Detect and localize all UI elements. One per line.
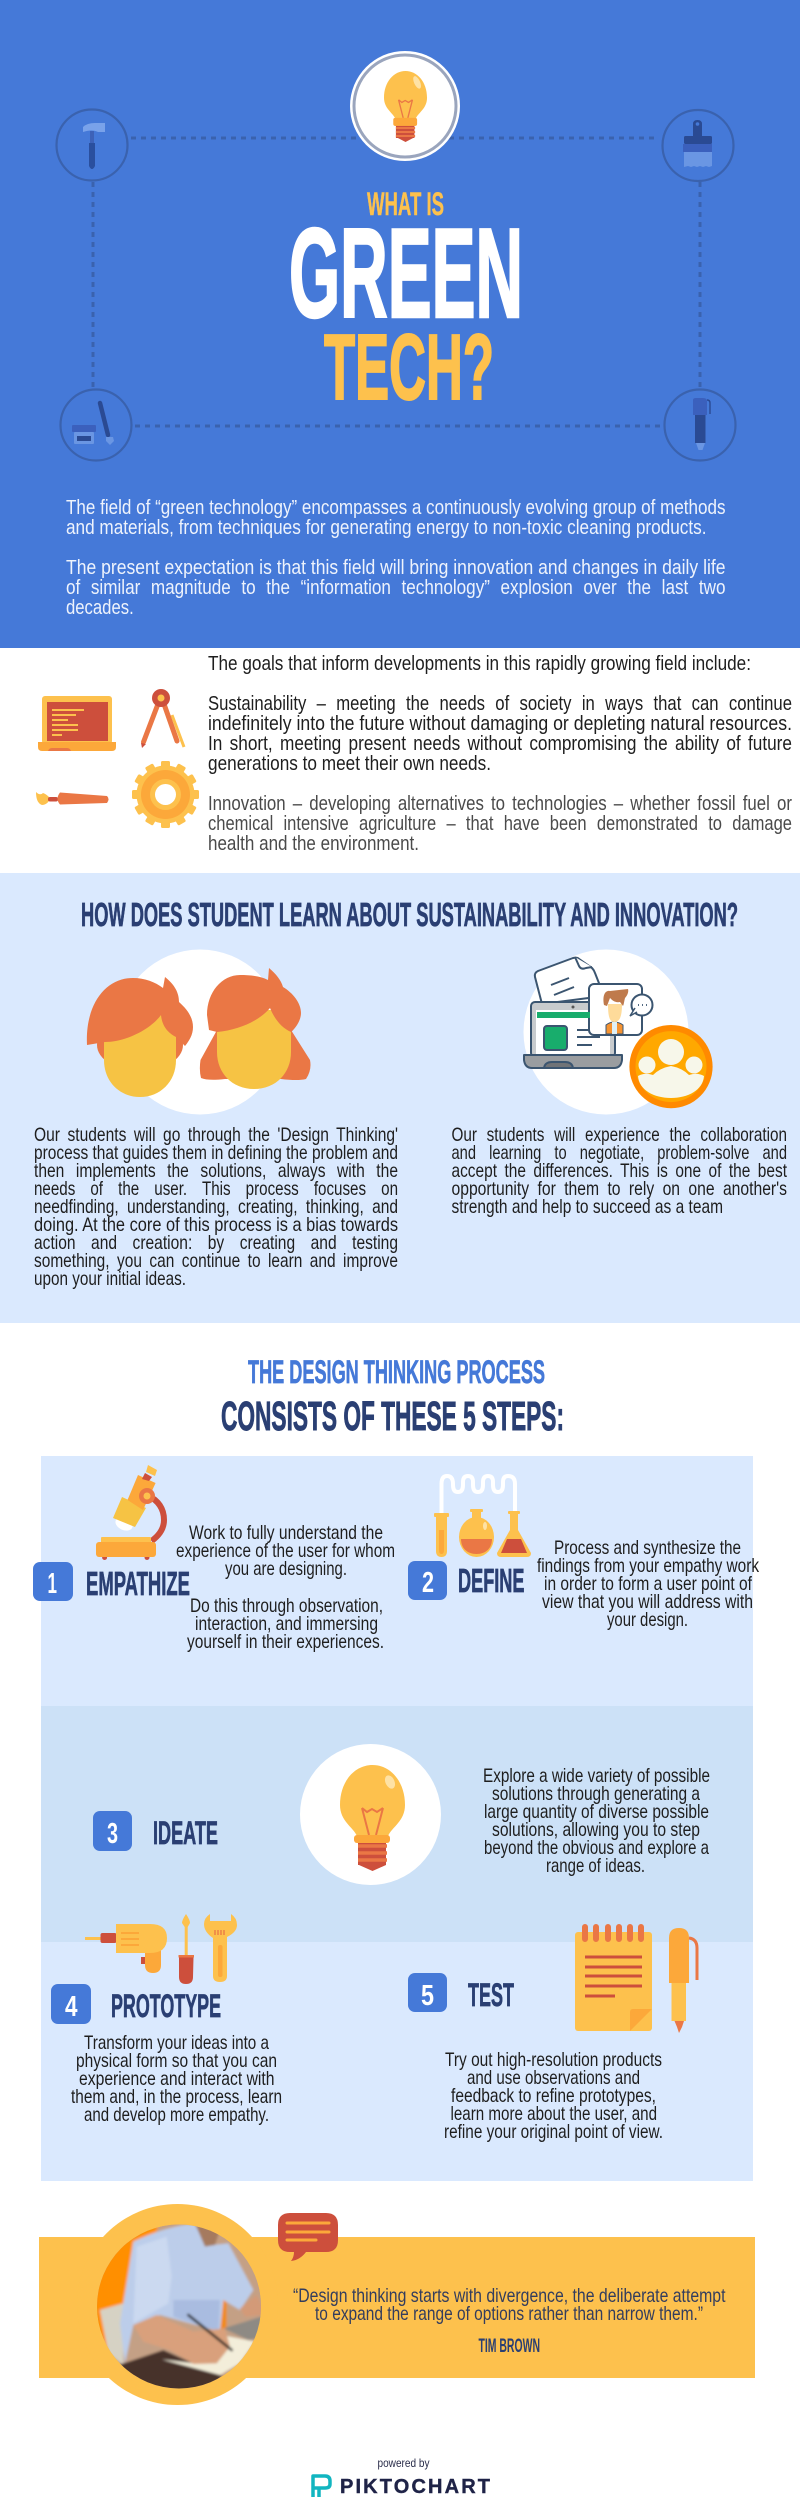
text: empathize description: [176, 1522, 395, 1653]
label: test: TEST: [468, 1977, 514, 2013]
icon: gear: [132, 761, 199, 828]
text: ideate description: range of ideas.: [546, 1855, 645, 1877]
text block: design thinking: process that guides them in defining the problem and: [34, 1142, 398, 1164]
text: prototype description: and develop more empathy.: [84, 2104, 269, 2126]
text: test description: feedback to refine prototypes,: [451, 2085, 656, 2107]
icon: marker: [664, 390, 736, 460]
badge: 1: 1: [48, 1568, 57, 1600]
step 5: test: [408, 1927, 697, 2143]
text: empathize description: interaction, and immersing: [195, 1613, 378, 1635]
footer: piktochart logo: PIKTOCHART: [340, 2476, 490, 2498]
footer: piktochart logo: [313, 2456, 490, 2498]
icon: hammer: [56, 110, 128, 180]
panel: quote: [39, 2204, 755, 2405]
icon: main light bulb badge: [350, 51, 460, 161]
badge: 1: [33, 1562, 73, 1601]
text: define description: your design.: [607, 1609, 688, 1631]
label: ideate: IDEATE: [153, 1815, 218, 1851]
text: empathize description: you are designing.: [225, 1558, 347, 1580]
panel: how students learn: [0, 873, 800, 1323]
text block: design thinking: action and creation: by creating and testing: [34, 1232, 398, 1254]
panel: five steps: [33, 1456, 759, 2181]
step 3: ideate: [93, 1744, 710, 1885]
badge: 2: [408, 1561, 447, 1600]
label: prototype: PROTOTYPE: [111, 1988, 221, 2024]
badge: 3: [93, 1811, 132, 1851]
text block: design thinking: something, you can continue to learn and improve: [34, 1250, 398, 1272]
text: quotation: to expand the range of options rather than narrow them.”: [315, 2303, 703, 2325]
icon: paintbrush: [36, 792, 108, 805]
icon: laptop: [38, 696, 116, 751]
text block: sustainability: [208, 692, 792, 775]
text block: design thinking: upon your initial ideas.: [34, 1268, 186, 1290]
icon: ink and pen: [60, 390, 132, 460]
text: prototype description: them and, in the process, learn: [71, 2086, 282, 2108]
icon: collaboration laptop: [524, 950, 713, 1114]
text block: sustainability: generations to meet their own needs.: [208, 752, 491, 775]
text: define description: [537, 1537, 759, 1631]
badge: 5: 5: [421, 1980, 434, 2012]
icon: light bulb: [300, 1744, 441, 1885]
title: GREEN: [289, 202, 523, 344]
badge: 3: 3: [107, 1818, 118, 1850]
text: prototype description: [71, 2032, 282, 2126]
text: test description: refine your original point of view.: [444, 2121, 663, 2143]
photo: person writing: [97, 2224, 261, 2388]
text: quotation: [293, 2285, 726, 2325]
footer: piktochart logo: powered by: [378, 2456, 430, 2470]
badge: 5: [408, 1973, 447, 2012]
badge: 4: 4: [65, 1991, 78, 2023]
text: define description: view that you will address with: [542, 1591, 753, 1613]
panel: header: [0, 0, 800, 648]
text: prototype description: experience and interact with: [79, 2068, 274, 2090]
icon: two student heads: [87, 950, 310, 1114]
icon: lab flasks: [434, 1476, 531, 1557]
text: prototype description: physical form so that you can: [76, 2050, 277, 2072]
icon: compass: [141, 689, 184, 748]
step 1: empathize: [33, 1465, 395, 1653]
text block: collaboration: strength and help to succeed as a team: [452, 1196, 723, 1218]
icon: speech bubble: [278, 2213, 338, 2261]
text: define description: in order to form a user point of: [544, 1573, 752, 1595]
text: ideate description: large quantity of diverse possible: [484, 1801, 709, 1823]
icon: notepad and pen: [575, 1927, 697, 2033]
icon: microscope: [96, 1465, 164, 1560]
heading: design thinking process: THE DESIGN THINKING PROCESS: [248, 1354, 545, 1390]
icon: paint brush: [662, 110, 734, 181]
heading: design thinking process: [221, 1354, 564, 1439]
title: TECH?: [324, 315, 494, 419]
text: ideate description: solutions through generating a: [492, 1783, 700, 1805]
text: test description: and use observations and: [467, 2067, 640, 2089]
text: empathize description: Work to fully understand the: [189, 1522, 383, 1544]
text: empathize description: experience of the user for whom: [176, 1540, 395, 1562]
text block: design thinking: [34, 1124, 398, 1290]
text block: design thinking: doing. At the core of this process is a bias towards: [34, 1214, 398, 1236]
text: define description: Process and synthesize the: [554, 1537, 741, 1559]
text block: design thinking: then implements the solutions, always with the: [34, 1160, 398, 1182]
text block: introduction: [66, 496, 726, 619]
text: quote author: TIM BROWN: [478, 2336, 540, 2357]
text: empathize description: yourself in their experiences.: [187, 1631, 384, 1653]
text block: innovation: [208, 792, 792, 855]
text: test description: learn more about the user, and: [450, 2103, 657, 2125]
icon: tools: [85, 1914, 237, 1984]
text block: design thinking: needfinding, understanding, creating, thinking, and: [34, 1196, 398, 1218]
text block: collaboration: [452, 1124, 787, 1218]
text block: design thinking: needs of the user. This process focuses on: [34, 1178, 398, 1200]
label: empathize: EMPATHIZE: [86, 1565, 190, 1602]
text: empathize description: Do this through observation,: [190, 1595, 383, 1617]
text: test description: [444, 2049, 663, 2143]
title: [289, 186, 523, 419]
text block: introduction: decades.: [66, 596, 134, 619]
title: WHAT IS: [367, 186, 444, 222]
text: ideate description: beyond the obvious and explore a: [484, 1837, 709, 1859]
step 2: define: [408, 1476, 759, 1631]
panel: goals: [36, 652, 792, 855]
badge: 4: [51, 1984, 91, 2024]
text block: design thinking: Our students will go through the 'Design Thinking': [34, 1124, 398, 1146]
text block: innovation: health and the environment.: [208, 832, 419, 855]
badge: 2: 2: [422, 1567, 434, 1599]
step 4: prototype: [51, 1914, 282, 2126]
text: ideate description: solutions, allowing you to step: [492, 1819, 700, 1841]
text: ideate description: [483, 1765, 710, 1877]
text: test description: Try out high-resolution products: [445, 2049, 662, 2071]
text: ideate description: Explore a wide variety of possible: [483, 1765, 710, 1787]
label: define: DEFINE: [458, 1562, 524, 1599]
text: prototype description: Transform your ideas into a: [84, 2032, 269, 2054]
